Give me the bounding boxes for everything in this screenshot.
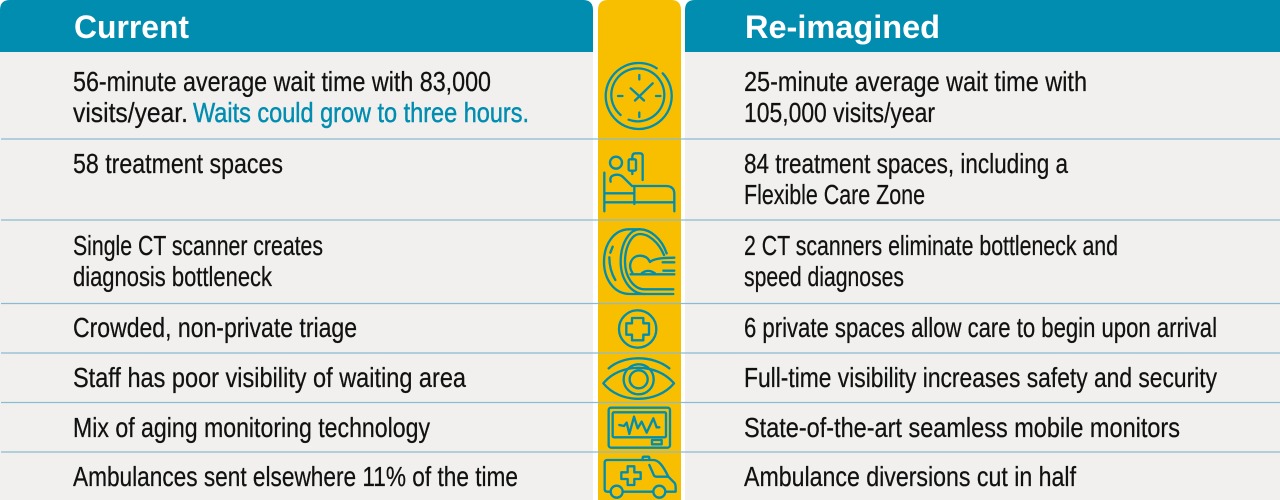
text: re-imagined treatment spaces: Flexible Care Zone bbox=[744, 179, 925, 210]
icon: eye bbox=[603, 358, 674, 399]
text: re-imagined CT scanners bbox=[744, 230, 1118, 292]
text: current wait time: Waits could grow to three hours. bbox=[193, 97, 529, 128]
text: current treatment spaces: 58 treatment spaces bbox=[73, 148, 283, 179]
text: current wait time: 56-minute average wait time with 83,000 bbox=[73, 66, 491, 97]
current header bar bbox=[0, 0, 593, 52]
icon: clock bbox=[606, 63, 672, 129]
text: re-imagined wait time bbox=[744, 66, 1087, 128]
text: re-imagined wait time: 25-minute average wait time with bbox=[744, 66, 1087, 97]
text: current visibility: Staff has poor visibility of waiting area bbox=[73, 362, 466, 393]
text: re-imagined CT scanners: speed diagnoses bbox=[744, 261, 904, 292]
text: re-imagined ambulance diversions: Ambulance diversions cut in half bbox=[744, 461, 1076, 492]
text: current monitoring: Mix of aging monitoring technology bbox=[73, 412, 430, 443]
text: re-imagined wait time: 105,000 visits/year bbox=[744, 97, 935, 128]
text: current CT scanner: Single CT scanner creates bbox=[73, 230, 323, 261]
text: current CT scanner bbox=[73, 230, 323, 292]
text: current ambulances: Ambulances sent elsewhere 11% of the time bbox=[73, 461, 518, 492]
icon: hospital bed bbox=[604, 153, 674, 211]
icon: CT scanner bbox=[604, 229, 674, 294]
text: current triage: Crowded, non-private triage bbox=[73, 312, 357, 343]
heading: re-imagined: Re-imagined bbox=[745, 9, 940, 45]
panel: icon column bbox=[598, 0, 681, 500]
re-imagined header bar bbox=[685, 0, 1280, 52]
panel: re-imagined bbox=[685, 0, 1280, 500]
text: current CT scanner: diagnosis bottleneck bbox=[73, 261, 273, 292]
icon: monitor bbox=[609, 408, 670, 448]
icon: ambulance bbox=[605, 457, 676, 498]
icon: medical cross bbox=[619, 310, 656, 348]
heading: current: Current bbox=[74, 9, 189, 45]
text: re-imagined treatment spaces: 84 treatment spaces, including a bbox=[744, 148, 1068, 179]
text: re-imagined treatment spaces bbox=[744, 148, 1068, 210]
text: re-imagined CT scanners: 2 CT scanners eliminate bottleneck and bbox=[744, 230, 1118, 261]
text: current wait time: visits/year. bbox=[73, 97, 188, 128]
text: current wait time bbox=[73, 66, 529, 128]
panel: current bbox=[0, 0, 593, 500]
text: re-imagined monitors: State-of-the-art seamless mobile monitors bbox=[744, 412, 1180, 443]
